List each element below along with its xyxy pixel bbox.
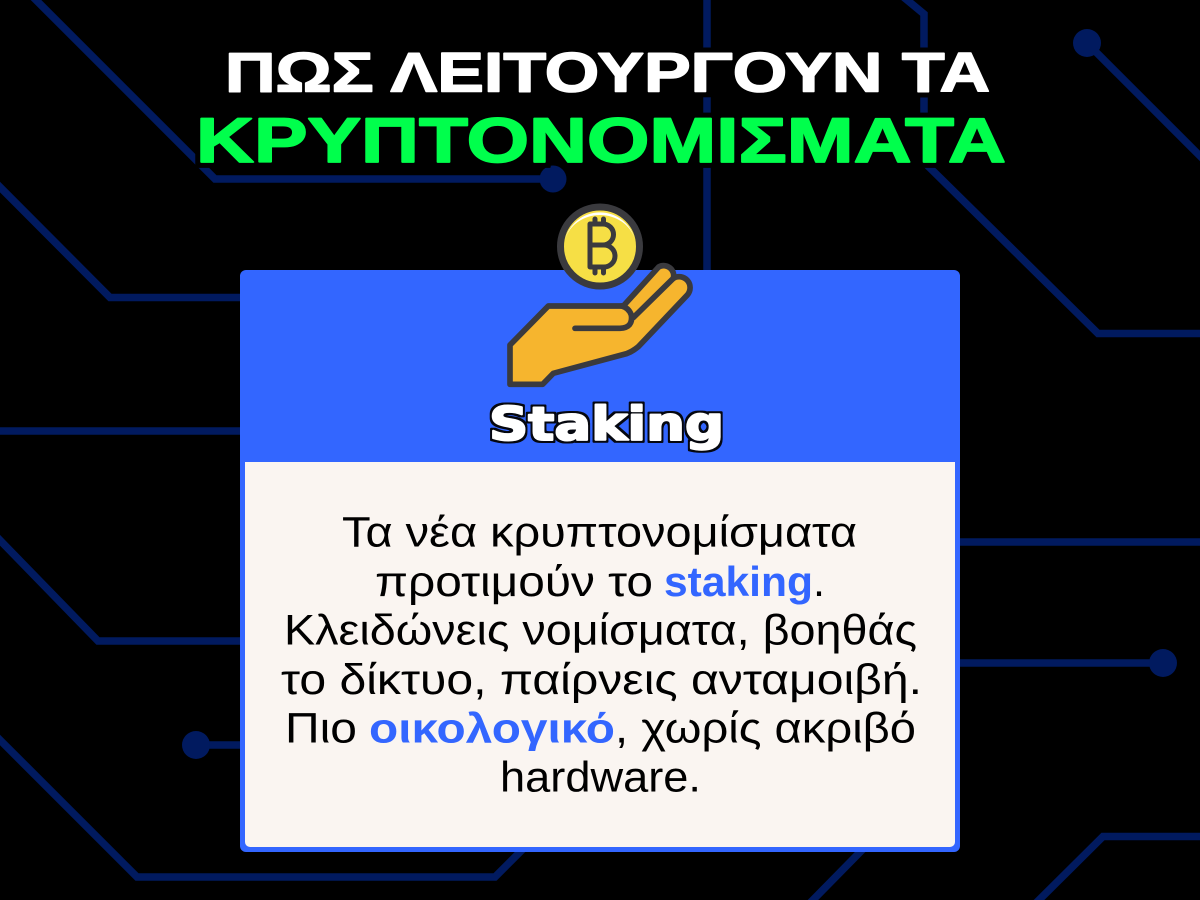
text block: staking description: , χωρίς ακριβό bbox=[615, 706, 916, 753]
text block: staking description: staking bbox=[664, 558, 813, 605]
text block: staking description: οικολογικό bbox=[369, 705, 615, 752]
panel: staking card bbox=[240, 270, 960, 852]
icon: bitcoin coin bbox=[560, 207, 640, 286]
card frame bbox=[240, 270, 960, 852]
title bbox=[196, 40, 1006, 176]
text block: staking description: το δίκτυο, παίρνεις ανταμοιβή. bbox=[281, 657, 922, 704]
text block: staking description: . bbox=[813, 559, 825, 606]
heading: Staking: Staking bbox=[489, 397, 724, 451]
text block: staking description: Τα νέα κρυπτονομίσματα bbox=[342, 510, 857, 557]
text block: staking description bbox=[281, 510, 922, 802]
text block: staking description: Πιο bbox=[285, 706, 357, 753]
title line 1: ΠΩΣ ΛΕΙΤΟΥΡΓΟΥΝ ΤΑ bbox=[225, 40, 990, 103]
title line 2: ΚΡΥΠΤΟΝΟΜΙΣΜΑΤΑ bbox=[196, 106, 1006, 176]
text block: staking description: hardware. bbox=[500, 755, 701, 802]
text block: staking description: προτιμούν το bbox=[375, 559, 653, 606]
icon: open hand bbox=[510, 266, 690, 384]
text block: staking description: Κλειδώνεις νομίσματα, βοηθάς bbox=[284, 608, 917, 655]
card body bbox=[245, 462, 955, 847]
